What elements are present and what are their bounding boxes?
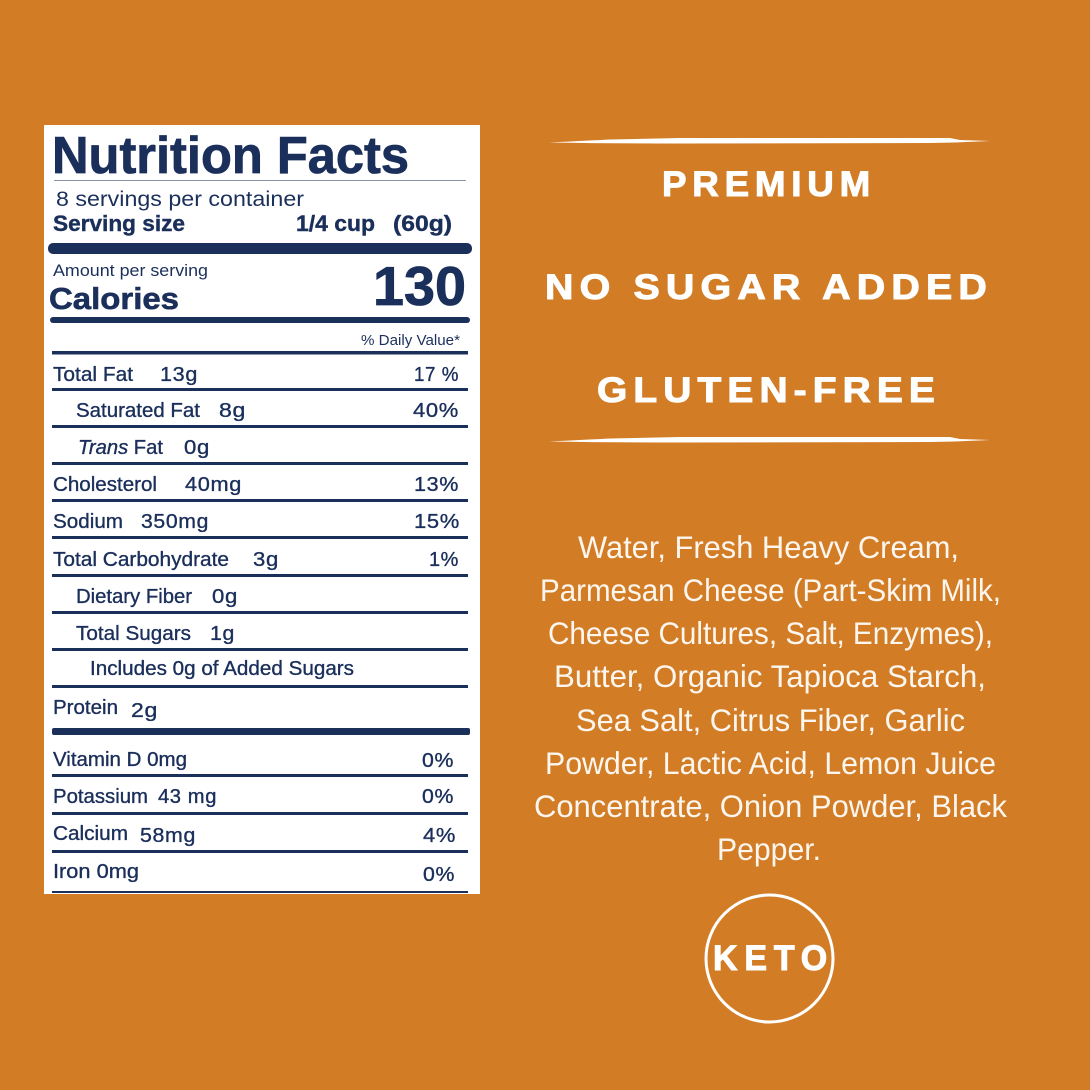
row: cholesterol [53,474,459,496]
row: dietary fiber: Dietary Fiber [76,586,192,608]
claim: no sugar added: NO SUGAR ADDED [545,268,993,307]
ingredients text block [534,529,1007,867]
claim: gluten-free: GLUTEN-FREE [597,371,941,410]
row: total sugars [76,623,235,645]
row: sodium: Sodium [53,511,123,533]
ingredients text block: Pepper. [717,831,821,867]
row: total fat: Total Fat [53,364,133,386]
row: calcium: Calcium [53,823,128,845]
row: saturated fat [76,400,459,422]
daily value header: % Daily Value* [361,332,460,349]
row: saturated fat: 40% [413,400,459,422]
ingredients text block: Sea Salt, Citrus Fiber, Garlic [576,702,965,738]
row: total sugars: 1g [210,623,235,645]
row: protein [53,697,158,722]
serving size: 1/4 cup [296,211,375,236]
row: potassium [53,786,454,808]
ingredients text block: Powder, Lactic Acid, Lemon Juice [545,745,996,781]
serving size: (60g) [393,211,452,236]
row: trans fat: 0g [184,437,210,459]
ingredients text block: Concentrate, Onion Powder, Black [534,788,1007,824]
row: potassium: Potassium [53,786,148,808]
ingredients text block: Cheese Cultures, Salt, Enzymes), [548,615,993,651]
claim: premium: PREMIUM [662,165,876,204]
panel: nutrition facts label [44,125,480,894]
top brush stroke [549,138,990,144]
servings per container: 8 servings per container [56,188,304,211]
ingredients text block: Water, Fresh Heavy Cream, [578,529,959,565]
row: total sugars: Total Sugars [76,623,191,645]
row: saturated fat: Saturated Fat [76,400,200,422]
row: calcium: 58mg [140,825,196,847]
row: total carbohydrate [53,549,459,571]
row: iron: Iron 0mg [53,861,139,883]
serving size [53,211,452,236]
ingredients text block: Parmesan Cheese (Part-Skim Milk, [540,572,1001,608]
row: cholesterol: 40mg [185,474,242,496]
row: potassium: 0% [422,786,454,808]
heading: Nutrition Facts: Nutrition Facts [52,127,409,185]
row: cholesterol: Cholesterol [53,474,157,496]
row: potassium: 43 mg [158,786,217,808]
row: calcium [53,823,456,847]
row: total carbohydrate: 1% [429,549,459,571]
row: total carbohydrate: 3g [253,549,279,571]
row: sodium [53,511,460,533]
row: saturated fat: 8g [219,400,246,422]
ingredients text block: Butter, Organic Tapioca Starch, [554,658,986,694]
row: total fat: 17 % [414,364,459,386]
row: iron [53,861,455,886]
row: vitamin d [53,749,454,772]
row: vitamin d: Vitamin D 0mg [53,749,187,771]
row: total fat: 13g [160,364,198,386]
row: cholesterol: 13% [414,474,459,496]
row: dietary fiber: 0g [212,586,238,608]
row: protein: Protein [53,697,118,719]
row: vitamin d: 0% [422,750,454,772]
amount per serving: Amount per serving [53,261,208,280]
calories value: 130 [373,255,466,317]
row: total carbohydrate: Total Carbohydrate [53,549,229,571]
row: protein: 2g [131,700,158,722]
calories label: Calories [49,281,179,316]
row: trans fat [78,437,210,459]
row: trans fat: Trans Fat [78,437,163,459]
keto badge [706,895,834,1022]
serving size: Serving size [53,211,185,236]
keto badge: KETO [713,939,834,978]
row: sodium: 15% [414,511,460,533]
row: iron: 0% [423,864,455,886]
row: added sugars: Includes 0g of Added Sugars [90,658,354,680]
row: sodium: 350mg [141,511,209,533]
bottom brush stroke [549,437,990,442]
row: calcium: 4% [423,825,456,847]
row: total fat [53,364,459,386]
